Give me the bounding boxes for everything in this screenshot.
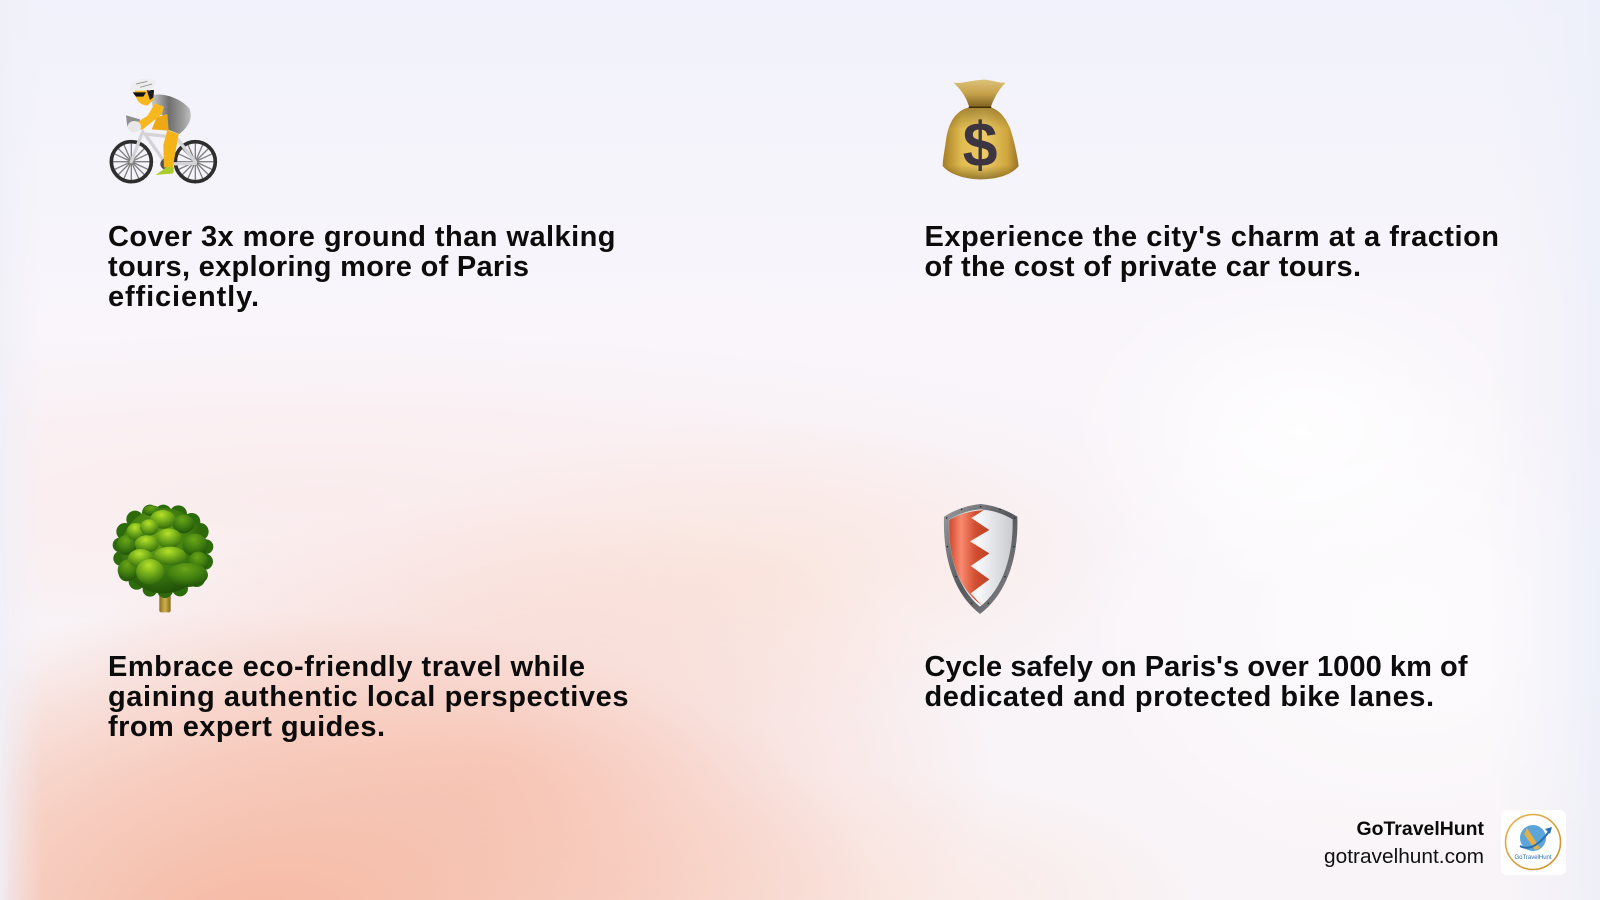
icon: cyclist: [111, 79, 215, 182]
text: eco-friendly travel: from expert guides.: [108, 711, 385, 743]
text: cover more ground: [108, 221, 616, 313]
text: cycle safely: [924, 651, 1468, 713]
icon: money bag: [943, 80, 1019, 180]
text: city's charm at a fraction of the cost: of the cost of private car tours.: [924, 251, 1361, 283]
icon: money bag: $: [963, 110, 997, 180]
logo badge: GoTravelHunt: [1514, 855, 1552, 861]
icon: tree: [113, 505, 213, 612]
text: cycle safely: dedicated and protected bike lanes.: [924, 681, 1434, 713]
text: eco-friendly travel: Embrace eco-friendly travel while: [108, 651, 585, 683]
footer brand name: GoTravelHunt: [1356, 819, 1485, 840]
text: city's charm at a fraction of the cost: [924, 221, 1499, 283]
logo badge: [1501, 810, 1566, 875]
footer website: gotravelhunt.com: [1324, 846, 1484, 868]
text: cycle safely: Cycle safely on Paris's over 1000 km of: [924, 651, 1468, 683]
text: eco-friendly travel: gaining authentic local perspectives: [108, 681, 628, 713]
text: city's charm at a fraction of the cost: Experience the city's charm at a fraction: [924, 221, 1499, 253]
text: eco-friendly travel: [108, 651, 628, 743]
text: cover more ground: efficiently.: [108, 281, 259, 313]
text: cover more ground: Cover 3x more ground than walking: [108, 221, 616, 253]
text: cover more ground: tours, exploring more of Paris: [108, 251, 529, 283]
icon: shield: [944, 504, 1017, 614]
